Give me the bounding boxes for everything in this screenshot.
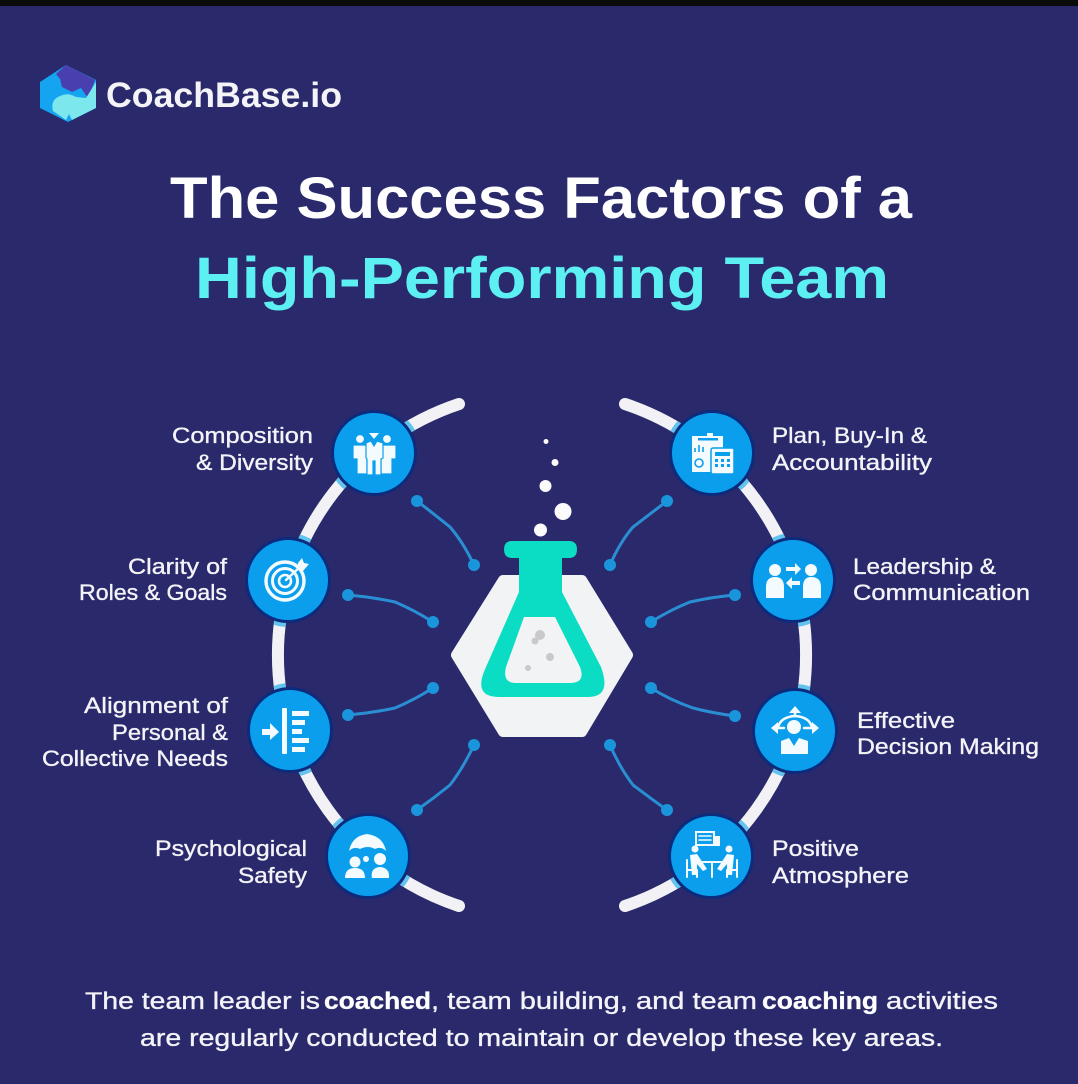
icon: puzzle hexagon	[40, 65, 96, 122]
node circle	[326, 814, 410, 898]
node circle	[248, 688, 332, 772]
label: Psychological	[155, 836, 307, 861]
flask	[481, 541, 604, 697]
label: Positive	[772, 836, 859, 861]
label	[857, 708, 1039, 759]
footer line 1: , team building, and team	[431, 988, 757, 1015]
label	[155, 836, 307, 888]
factor: Leadership & Communication	[752, 538, 1030, 622]
logo wordmark: CoachBase.io	[106, 76, 342, 115]
factor: Clarity of Roles & Goals	[79, 538, 330, 622]
title	[170, 166, 913, 311]
node circle	[670, 412, 754, 494]
title line 1: The Success Factors of a	[170, 166, 913, 231]
footer line 1: The team leader is	[85, 988, 320, 1015]
label	[772, 836, 909, 888]
footer line 1: activities	[886, 988, 998, 1015]
label: Accountability	[772, 450, 932, 475]
footer line 1: coached	[324, 988, 431, 1015]
hexagon badge	[456, 580, 628, 732]
title line 2: High-Performing Team	[195, 246, 889, 311]
connector: upper mid left	[342, 589, 439, 628]
label	[172, 423, 313, 475]
label: Collective Needs	[42, 746, 228, 771]
label: Alignment of	[84, 693, 229, 718]
flask contents	[525, 630, 554, 671]
label: Communication	[853, 580, 1030, 605]
icon: align arrow	[262, 708, 309, 754]
footer line 1	[85, 988, 998, 1015]
label: Safety	[238, 863, 307, 888]
node circle	[246, 538, 330, 622]
label: Effective	[857, 708, 955, 733]
label: Leadership &	[853, 554, 996, 579]
label: Roles & Goals	[79, 580, 227, 605]
factor: Plan, Buy-In & Accountability	[670, 412, 932, 494]
factor: Psychological Safety	[155, 814, 410, 898]
node circle	[670, 814, 752, 898]
icon: person with direction arrows	[771, 706, 819, 754]
connector: top left	[411, 495, 480, 571]
connector: lower mid left	[342, 682, 439, 721]
connector lines	[342, 495, 741, 816]
connector: top right	[604, 495, 673, 571]
factor: Positive Atmosphere	[670, 814, 909, 898]
right arc	[625, 404, 806, 906]
icon: meeting at table	[687, 832, 737, 877]
footer line 1: coaching	[762, 988, 878, 1015]
label: & Diversity	[196, 450, 313, 475]
connector: bottom left	[411, 739, 480, 816]
connector: lower mid right	[645, 682, 741, 722]
label: Composition	[172, 423, 313, 448]
icon: team	[353, 433, 396, 475]
icon: clipboard and calculator	[692, 433, 734, 474]
label	[772, 423, 932, 475]
factor: Effective Decision Making	[754, 690, 1039, 772]
label: Decision Making	[857, 734, 1039, 759]
label	[853, 554, 1030, 605]
label	[42, 693, 229, 771]
label: Personal &	[112, 720, 228, 745]
factor: Alignment of Personal & Collective Needs	[42, 688, 332, 772]
icon: umbrella and people	[345, 834, 389, 878]
central flask on hexagon	[456, 439, 628, 732]
bubbles	[534, 439, 572, 536]
footer text	[85, 988, 998, 1052]
factor: Composition & Diversity	[172, 412, 416, 494]
arc highlights near nodes	[278, 404, 806, 906]
connector: bottom right	[604, 739, 673, 816]
node circle	[332, 412, 416, 494]
icon: target	[266, 558, 309, 600]
left arc	[278, 404, 459, 906]
node circle	[754, 690, 836, 772]
footer line 2: are regularly conducted to maintain or develop these key areas.	[140, 1025, 943, 1052]
icon: two people exchange	[766, 563, 821, 598]
node circle	[752, 538, 834, 622]
label: Clarity of	[128, 554, 228, 579]
label: Atmosphere	[772, 863, 909, 888]
label	[79, 554, 228, 605]
connector: upper mid right	[645, 589, 741, 628]
logo: CoachBase.io	[40, 65, 342, 122]
label: Plan, Buy-In &	[772, 423, 927, 448]
